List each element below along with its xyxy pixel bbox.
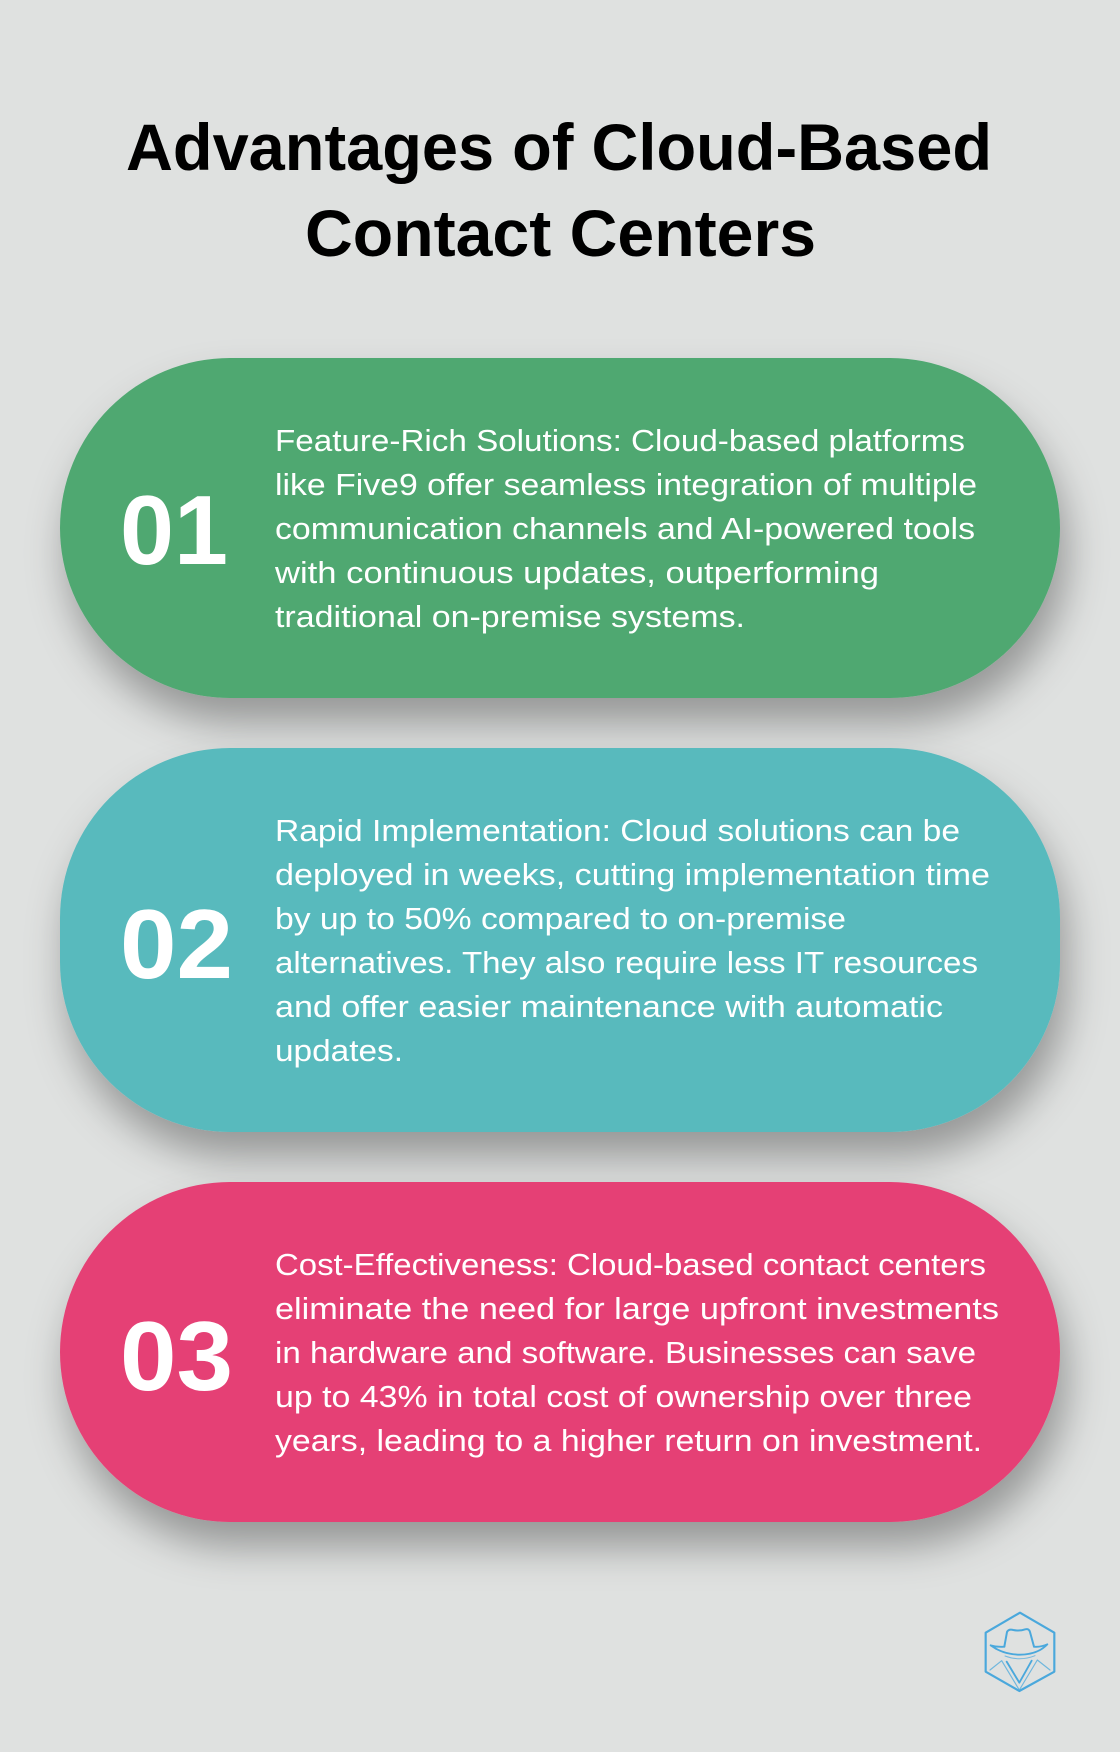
panel: 01 feature-rich solutions <box>60 358 1060 698</box>
text block 02: by up to 50% compared to on-premise <box>275 901 846 936</box>
text block 01 <box>274 423 977 634</box>
text block 03: in hardware and software. Businesses can save <box>275 1335 976 1370</box>
title <box>126 110 992 270</box>
pink pill background <box>60 1182 1060 1522</box>
text block 02 <box>275 813 990 1068</box>
number 03: 03 <box>120 1301 233 1411</box>
text block 03: up to 43% in total cost of ownership over three <box>275 1379 972 1414</box>
text block 01: communication channels and AI-powered tools <box>275 511 975 546</box>
text block 03 <box>275 1247 999 1458</box>
text block 01: like Five9 offer seamless integration of multiple <box>275 467 977 502</box>
text block 03: years, leading to a higher return on investment. <box>275 1423 982 1458</box>
text block 03: Cost-Effectiveness: Cloud-based contact centers <box>275 1247 986 1282</box>
text block 01: with continuous updates, outperforming <box>274 555 879 590</box>
text block 02: updates. <box>275 1033 403 1068</box>
green pill background <box>60 358 1060 698</box>
title: Advantages of Cloud-Based <box>126 110 992 184</box>
text block 01: traditional on-premise systems. <box>275 599 745 634</box>
text block 02: and offer easier maintenance with automatic <box>275 989 943 1024</box>
number 02: 02 <box>120 889 233 999</box>
text block 01: Feature-Rich Solutions: Cloud-based platforms <box>275 423 965 458</box>
number 01: 01 <box>120 475 228 585</box>
title: Contact Centers <box>305 196 816 270</box>
icon: logo hexagon with hat-wearing spy <box>986 1613 1054 1691</box>
text block 02: alternatives. They also require less IT resources <box>275 945 978 980</box>
text block 02: deployed in weeks, cutting implementation time <box>275 857 990 892</box>
panel: 03 cost-effectiveness <box>60 1182 1060 1522</box>
text block 03: eliminate the need for large upfront investments <box>275 1291 999 1326</box>
text block 02: Rapid Implementation: Cloud solutions can be <box>275 813 960 848</box>
panel: 02 rapid implementation <box>60 748 1060 1132</box>
teal pill background <box>60 748 1060 1132</box>
